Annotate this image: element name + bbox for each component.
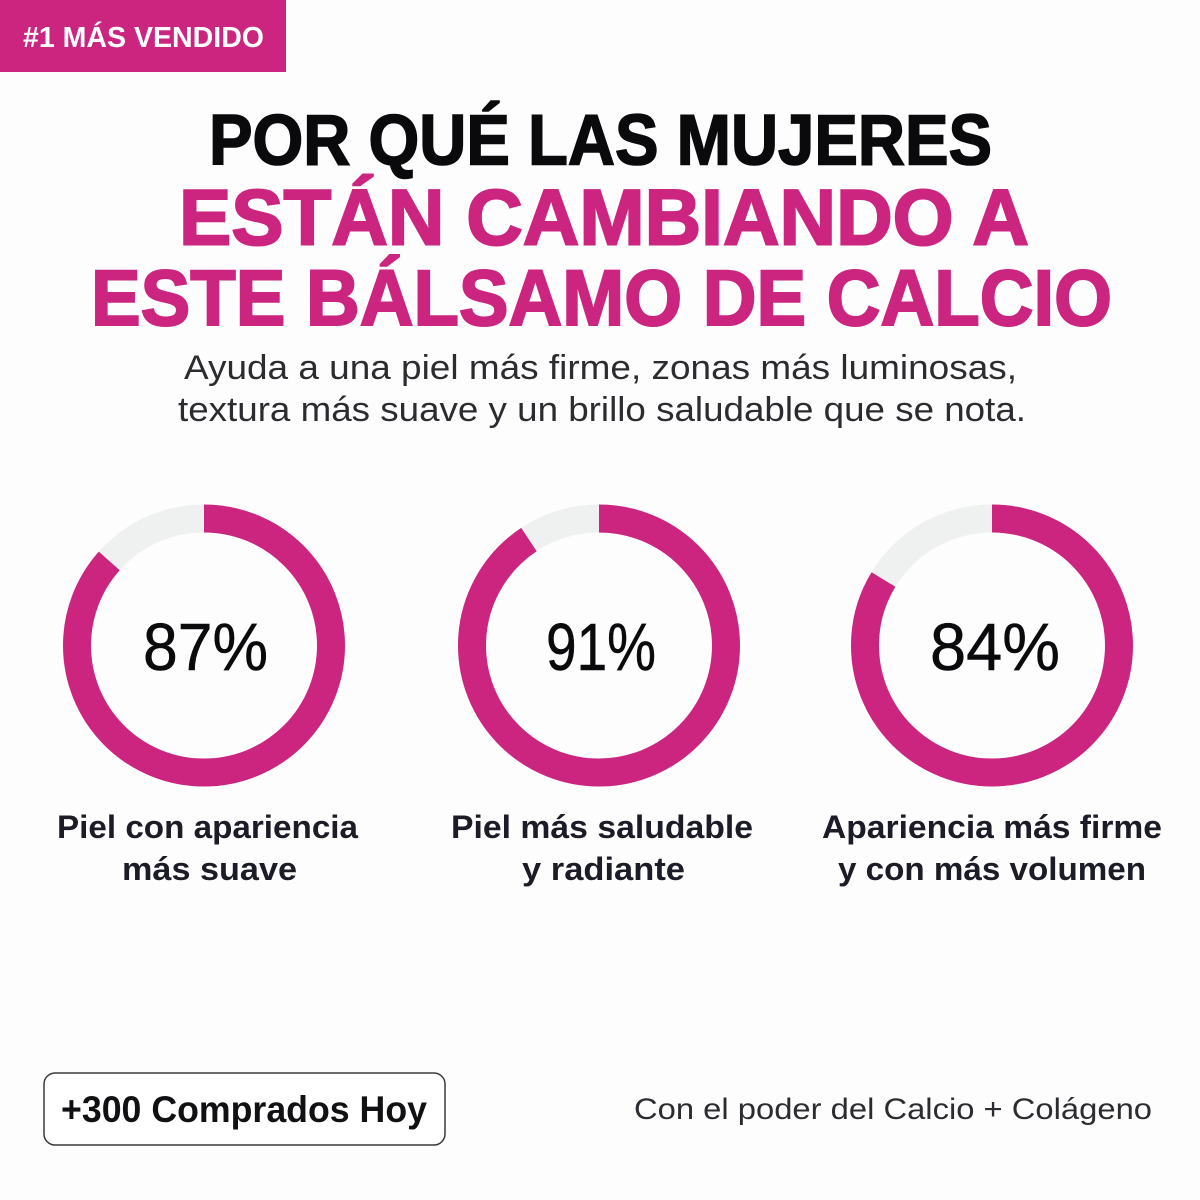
badge: #1 más vendido: #1 MÁS VENDIDO bbox=[23, 20, 264, 54]
donut chart: 91% piel más saludable y radiante bbox=[472, 518, 726, 772]
title: POR QUÉ LAS MUJERES bbox=[209, 102, 992, 180]
label: piel más saludable y radiante: Piel más saludable bbox=[451, 809, 753, 845]
label: piel con apariencia más suave bbox=[57, 809, 358, 887]
donut chart: 91% piel más saludable y radiante: 91% bbox=[546, 610, 656, 685]
donut chart: 87% piel con apariencia más suave bbox=[77, 518, 331, 772]
subtitle: textura más suave y un brillo saludable que se nota. bbox=[178, 391, 1026, 429]
callout: +300 comprados hoy bbox=[44, 1073, 445, 1145]
label: piel más saludable y radiante bbox=[451, 809, 753, 887]
title: ESTÁN CAMBIANDO A bbox=[179, 172, 1029, 262]
badge: #1 más vendido bbox=[0, 0, 286, 72]
label: piel más saludable y radiante: y radiante bbox=[522, 851, 685, 887]
label: piel con apariencia más suave: Piel con apariencia bbox=[57, 809, 358, 845]
donut chart: 87% piel con apariencia más suave: 87% bbox=[143, 610, 268, 685]
donut chart: 84% apariencia más firme y con más volumen bbox=[865, 518, 1119, 772]
label: apariencia más firme y con más volumen: y con más volumen bbox=[838, 851, 1146, 887]
donut chart: 84% apariencia más firme y con más volumen: 84% bbox=[930, 610, 1060, 685]
label: piel con apariencia más suave: más suave bbox=[122, 851, 297, 887]
callout: +300 comprados hoy: +300 Comprados Hoy bbox=[61, 1089, 427, 1130]
subtitle bbox=[178, 349, 1026, 429]
subtitle: Ayuda a una piel más firme, zonas más luminosas, bbox=[184, 349, 1017, 387]
footer text: con el poder del calcio + colágeno: Con el poder del Calcio + Colágeno bbox=[634, 1093, 1152, 1126]
title bbox=[91, 102, 1112, 342]
title: ESTE BÁLSAMO DE CALCIO bbox=[91, 253, 1112, 342]
label: apariencia más firme y con más volumen: Apariencia más firme bbox=[822, 809, 1162, 845]
label: apariencia más firme y con más volumen bbox=[822, 809, 1162, 887]
